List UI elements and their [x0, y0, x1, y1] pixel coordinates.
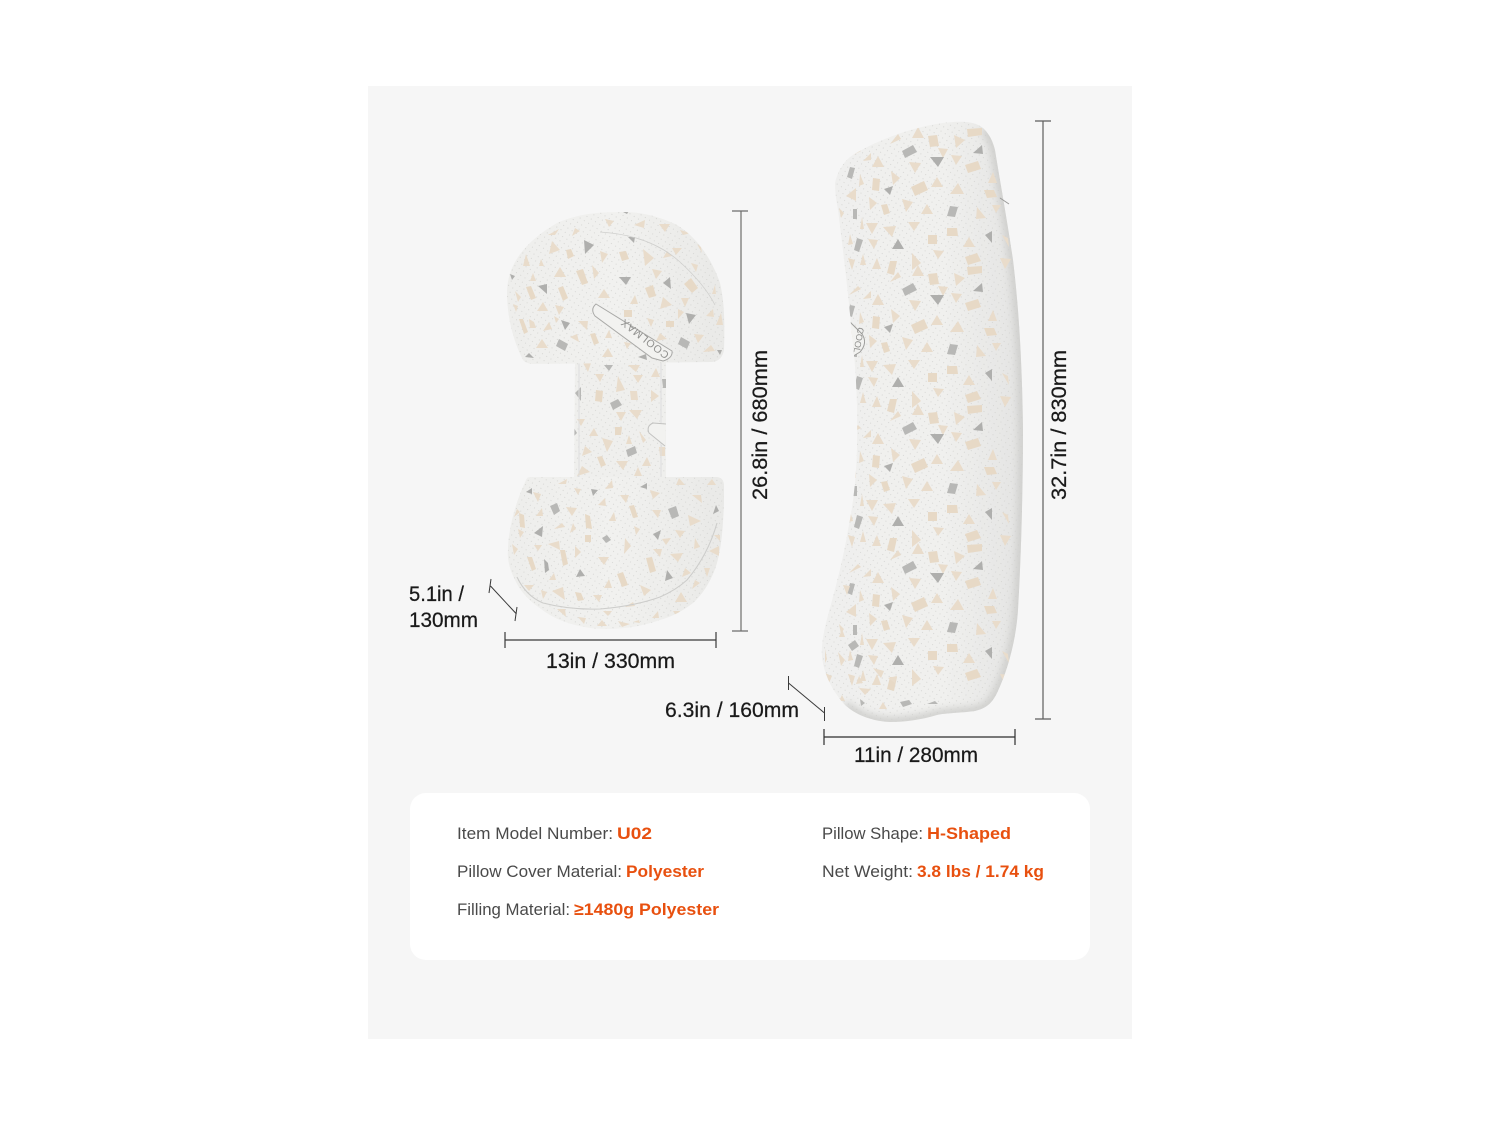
dimension: body pillow height	[1035, 121, 1071, 719]
neck COOLMAX tag	[648, 423, 666, 446]
dimension: left pillow height: 26.8in / 680mm	[748, 350, 772, 500]
spec: pillow cover material: Pillow Cover Material:	[457, 862, 622, 881]
dimension: left pillow width	[505, 632, 716, 673]
spec: filling material: ≥1480g Polyester	[574, 900, 719, 919]
confetti print	[825, 127, 1011, 709]
spec: pillow cover material	[457, 862, 704, 881]
dimension: left pillow height	[732, 211, 772, 631]
dimension: body pillow depth	[665, 676, 824, 722]
spec: pillow shape: Pillow Shape:	[822, 824, 923, 843]
background panel	[368, 86, 1132, 1039]
spec: pillow cover material: Polyester	[626, 862, 704, 881]
spec: filling material: Filling Material:	[457, 900, 570, 919]
dimension: left pillow depth: 130mm	[409, 608, 478, 632]
dimension: body pillow width: 11in / 280mm	[854, 743, 978, 767]
dimension: body pillow height: 32.7in / 830mm	[1047, 350, 1071, 500]
pillow: U-shaped pillow unfolded	[505, 210, 727, 631]
panel: specifications	[410, 793, 1090, 960]
edge shading	[845, 129, 1023, 722]
dimension: left pillow width: 13in / 330mm	[546, 649, 675, 673]
spec: net weight: Net Weight:	[822, 862, 913, 881]
head COOLMAX tag: COOLMAX	[618, 316, 672, 361]
head COOLMAX tag	[593, 304, 672, 361]
side tag thread	[1000, 198, 1009, 204]
spec: item model number: U02	[617, 824, 652, 843]
pillow head section	[505, 210, 727, 366]
spec: item model number: Item Model Number:	[457, 824, 613, 843]
body pillow COOLMAX tag: COOL	[851, 327, 866, 354]
dimension: left pillow depth: 5.1in /	[409, 582, 464, 606]
dimension: body pillow depth: 6.3in / 160mm	[665, 698, 799, 722]
pillow: long body pillow	[820, 118, 1026, 724]
spec: filling material	[457, 900, 719, 919]
dimension: body pillow width	[824, 729, 1015, 767]
spec: net weight	[822, 862, 1044, 881]
pillow neck strip	[574, 360, 667, 482]
dimension: left pillow depth	[409, 579, 517, 632]
spec: pillow shape	[822, 824, 1011, 843]
spec: net weight: 3.8 lbs / 1.74 kg	[917, 862, 1044, 881]
pillow lower section	[506, 475, 726, 631]
spec: pillow shape: H-Shaped	[927, 824, 1011, 843]
